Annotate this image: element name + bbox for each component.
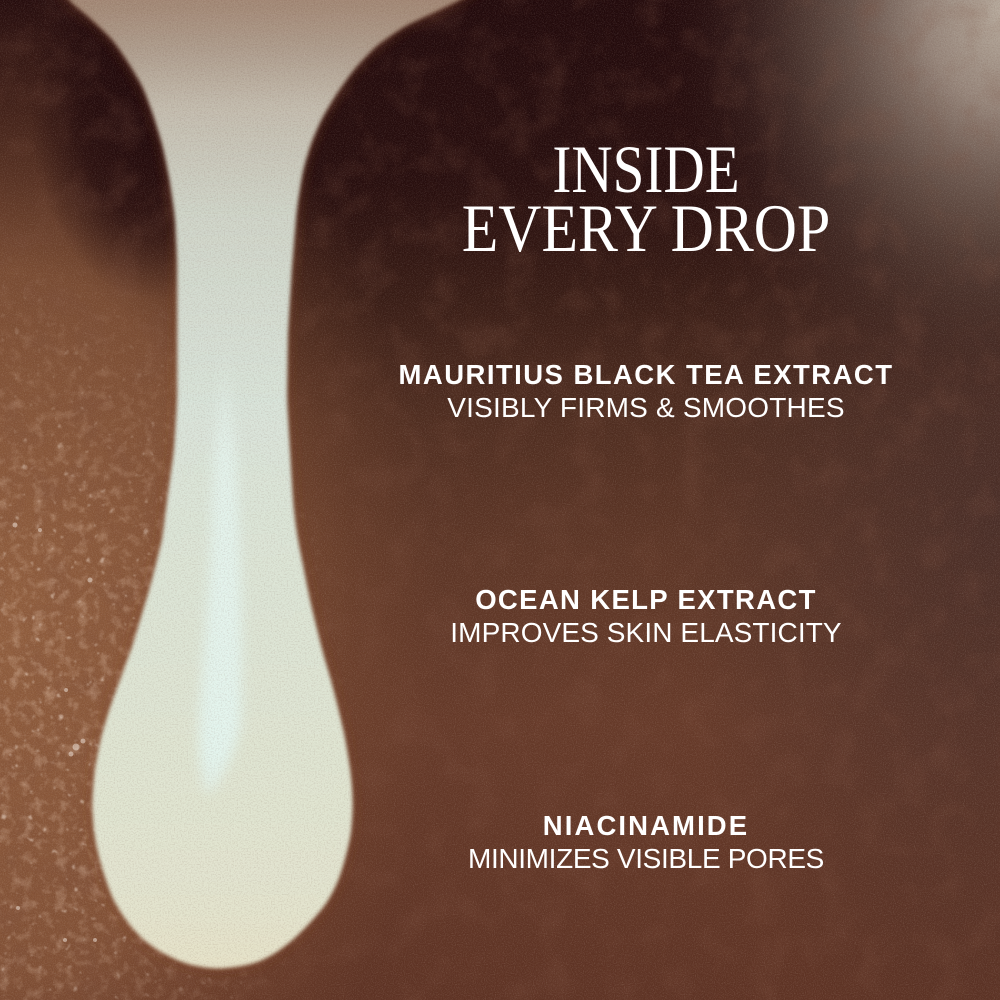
benefit: kelp: IMPROVES SKIN ELASTICITY <box>450 617 842 648</box>
title line two: EVERY DROP <box>462 190 830 266</box>
title line one: INSIDE <box>552 131 740 207</box>
heading: tea: MAURITIUS BLACK TEA EXTRACT <box>399 359 893 390</box>
heading: kelp: OCEAN KELP EXTRACT <box>475 584 817 615</box>
text block: niacinamide <box>468 810 824 874</box>
title <box>462 131 830 266</box>
text block: kelp <box>450 584 842 648</box>
benefit: tea: VISIBLY FIRMS & SMOOTHES <box>447 392 845 423</box>
benefit: niacinamide: MINIMIZES VISIBLE PORES <box>468 843 824 874</box>
icon: white drop <box>50 0 510 969</box>
text block: black tea <box>399 359 893 423</box>
heading: niacinamide: NIACINAMIDE <box>543 810 749 841</box>
